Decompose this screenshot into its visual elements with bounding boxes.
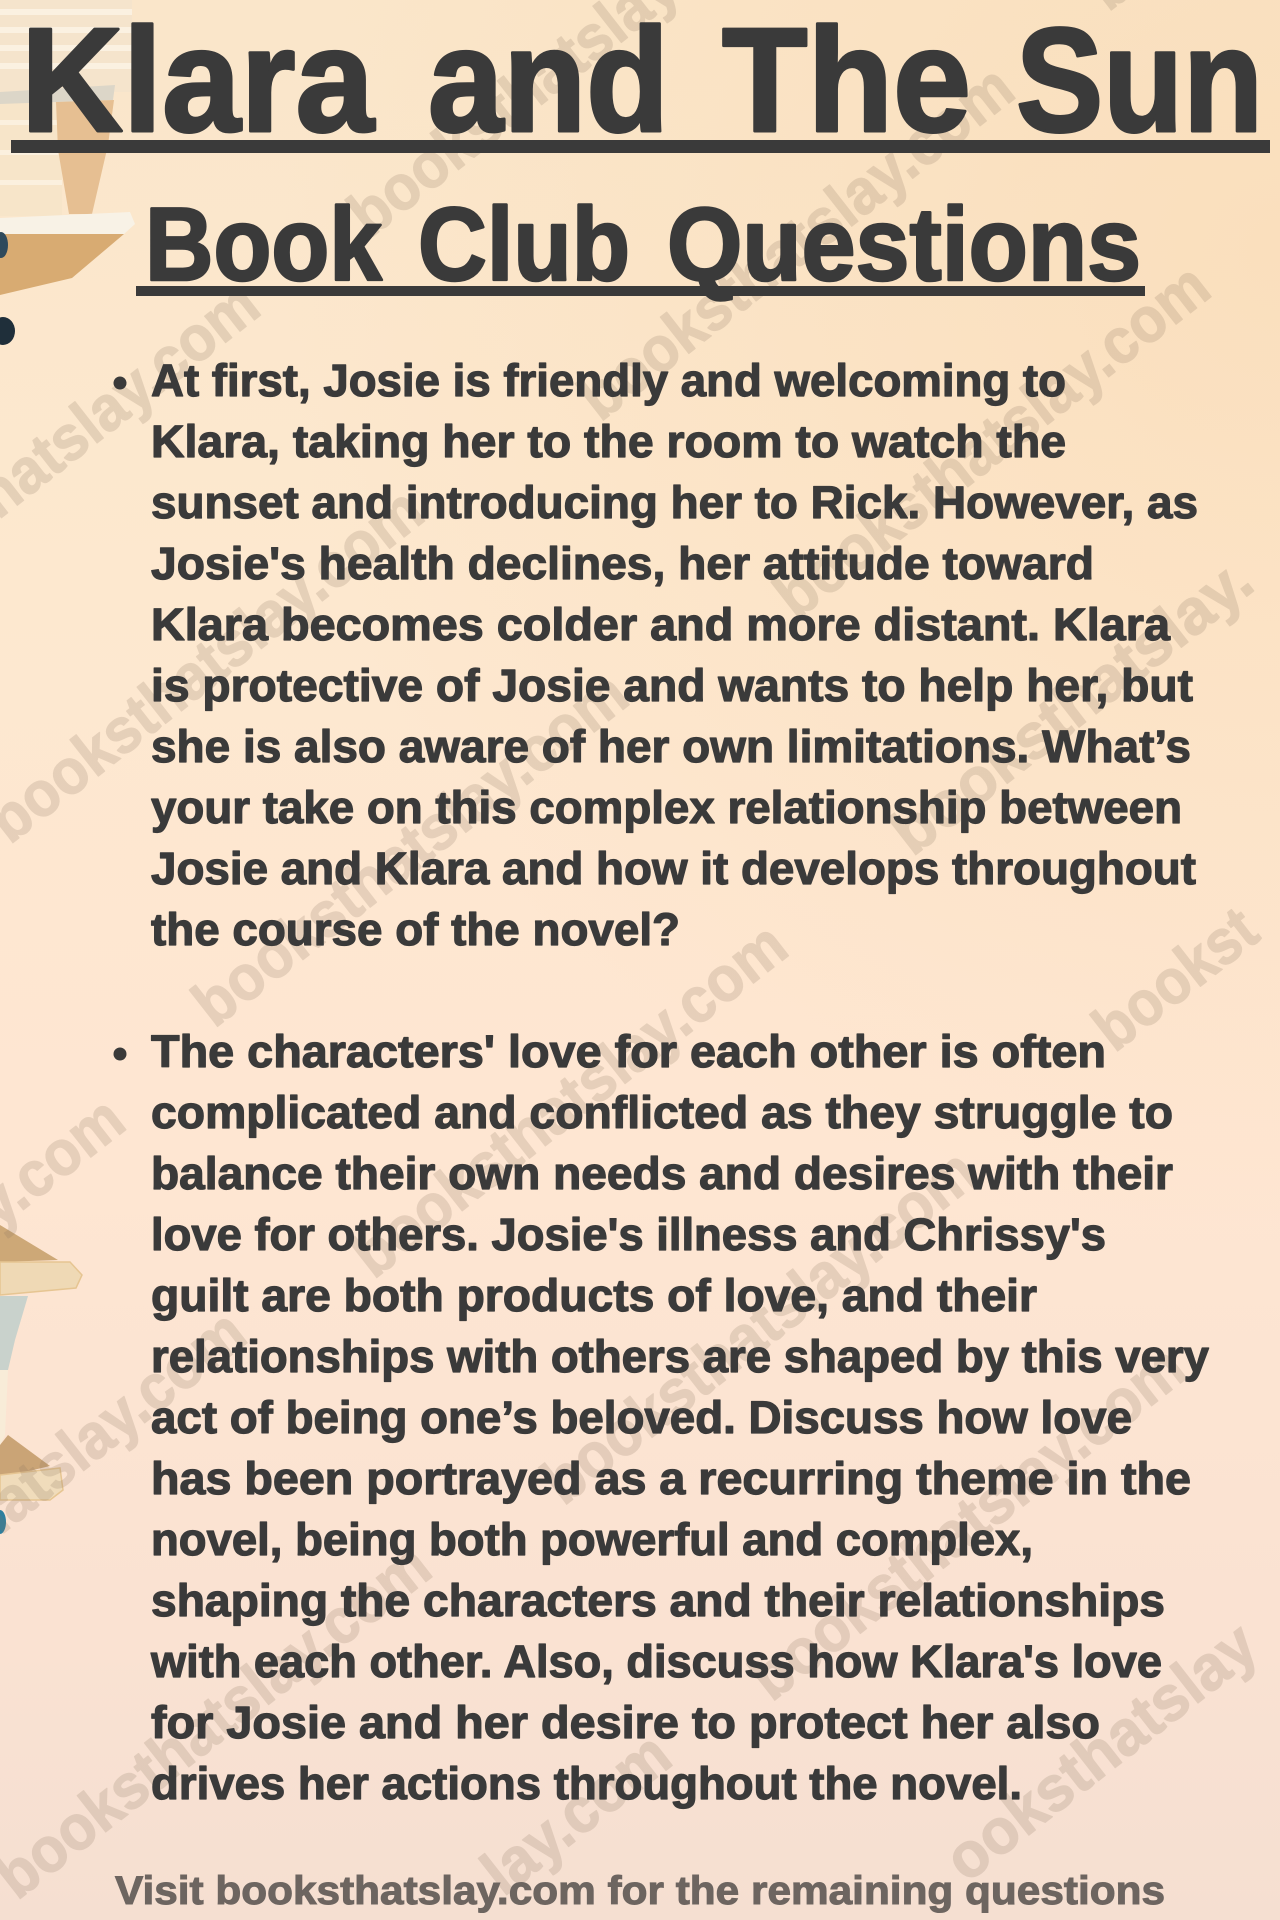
question 2: love for others. Josie's illness and Chrissy's — [151, 1209, 1106, 1260]
question 2: balance their own needs and desires with their — [151, 1148, 1173, 1199]
question 2: shaping the characters and their relationships — [151, 1575, 1165, 1626]
question 2: complicated and conflicted as they struggle to — [151, 1087, 1173, 1138]
question 1: is protective of Josie and wants to help her, but — [151, 660, 1193, 711]
question 1: Josie's health declines, her attitude toward — [151, 538, 1094, 589]
footer note: Visit booksthatslay.com for the remaining questions — [115, 1869, 1165, 1913]
illustration: lower shelf unit at left edge — [0, 1225, 82, 1534]
question 2: relationships with others are shaped by this very — [151, 1331, 1209, 1382]
question 2: has been portrayed as a recurring theme in the — [151, 1453, 1191, 1504]
watermarks: booksthatslay. — [877, 543, 1266, 868]
question 1: Klara becomes colder and more distant. Klara — [151, 599, 1171, 650]
watermarks: booksthatslay.com — [565, 51, 1027, 434]
question 1 — [114, 355, 1198, 955]
title — [11, 0, 1270, 163]
question 2: for Josie and her desire to protect her also — [151, 1697, 1100, 1748]
question 1: your take on this complex relationship between — [151, 782, 1182, 833]
question 1: Josie and Klara and how it develops throughout — [151, 843, 1196, 894]
title: The — [722, 0, 971, 163]
question 1: Klara, taking her to the room to watch the — [151, 416, 1066, 467]
watermarks: booksthatslay.com — [179, 657, 641, 1040]
subtitle: Questions — [667, 187, 1141, 303]
watermarks: lay.com — [468, 1718, 684, 1908]
watermarks: booksthatslay.com — [761, 250, 1223, 632]
subtitle — [136, 187, 1145, 303]
question 2: The characters' love for each other is often — [151, 1026, 1106, 1077]
subtitle: Club — [418, 187, 630, 303]
question 2: novel, being both powerful and complex, — [151, 1514, 1033, 1565]
question 2: drives her actions throughout the novel. — [151, 1758, 1022, 1809]
question 1: At first, Josie is friendly and welcoming to — [151, 355, 1066, 406]
question 2 — [114, 1026, 1209, 1809]
question 2: guilt are both products of love, and their — [151, 1270, 1037, 1321]
watermarks: booksthatslay.com — [737, 1331, 1198, 1714]
subtitle: Book — [145, 187, 382, 303]
title: and — [428, 0, 669, 163]
watermarks: booksthatslay.com — [339, 909, 800, 1291]
question 1: she is also aware of her own limitations. What’s — [151, 721, 1191, 772]
question 1: the course of the novel? — [151, 904, 680, 955]
title: Klara — [21, 0, 376, 163]
question 2: act of being one’s beloved. Discuss how love — [151, 1392, 1132, 1443]
watermarks: ooksthatslay — [931, 1608, 1271, 1895]
illustration: upper shelf unit at left edge — [0, 0, 135, 345]
watermarks: booksthatslay.com — [528, 1135, 990, 1518]
question 1: sunset and introducing her to Rick. However, as — [151, 477, 1198, 528]
question 2: with each other. Also, discuss how Klara's love — [150, 1636, 1162, 1687]
